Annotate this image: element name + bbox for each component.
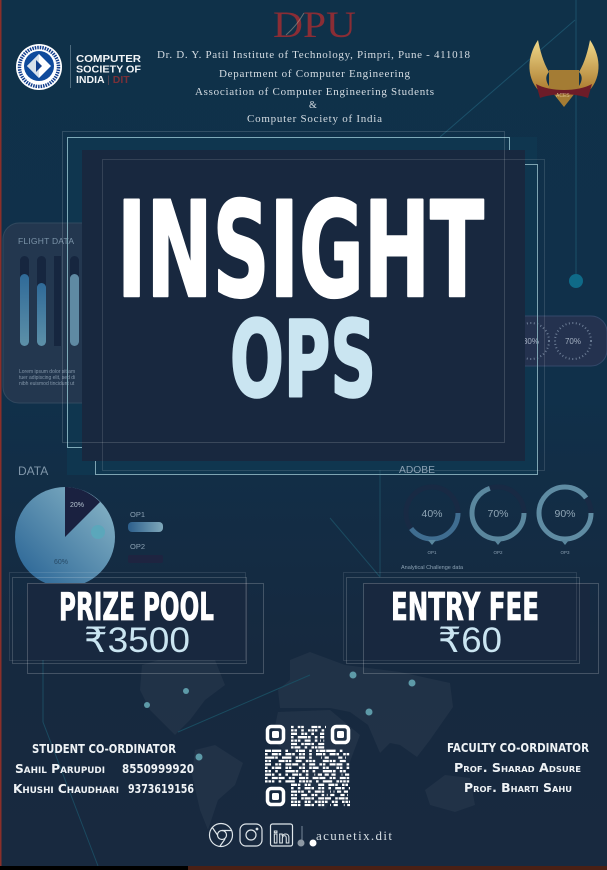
map location dots	[144, 672, 416, 760]
faculty co-ordinators	[447, 741, 589, 795]
ring charts: 70%	[487, 508, 509, 520]
student co-ordinators: Sahil Parupudi	[15, 761, 105, 776]
student co-ordinators: STUDENT CO-ORDINATOR	[32, 741, 176, 756]
ring charts: 40%	[421, 508, 443, 520]
panel: flight data dashboard: tuer adipiscing elit, sed di	[19, 375, 75, 381]
icon: linkedin: in	[273, 828, 290, 847]
icon: instagram	[240, 824, 262, 846]
logo: Computer Society of India: INDIA | DIT	[76, 74, 130, 86]
ring charts: OP1	[427, 550, 437, 555]
panel: flight data dashboard: nibh euismod tincidunt ut	[19, 381, 75, 387]
pie chart: OP1	[130, 510, 145, 519]
icon: teal marker	[569, 274, 583, 288]
ring charts: OP2	[493, 550, 503, 555]
panel: prize pool: ₹3500	[84, 621, 190, 660]
handle: acunetix.dit	[298, 826, 392, 846]
pie chart: OP2	[130, 542, 145, 551]
panel: gauge dials	[500, 316, 607, 366]
header: institute text: Department of Computer Engineering	[219, 68, 410, 80]
handle: acunetix.dit: acunetix.dit	[316, 828, 392, 843]
panel: entry fee: ₹60	[438, 621, 502, 660]
pie chart: 20%	[70, 502, 84, 509]
icon: chrome	[210, 824, 232, 846]
ring charts: ADOBE	[399, 465, 435, 476]
pie chart	[15, 464, 163, 587]
header: institute text: Computer Society of India	[247, 113, 382, 125]
header: institute text	[157, 49, 470, 125]
panel: flight data dashboard: FLIGHT DATA	[18, 236, 74, 246]
panel: gauge dials: 30%	[523, 337, 539, 346]
title: OPS	[230, 299, 376, 421]
panel: flight data dashboard: Lorem ipsum dolor sit am	[19, 369, 75, 375]
title	[117, 174, 484, 421]
panel: entry fee	[344, 572, 598, 674]
map connector line	[178, 675, 310, 732]
icon: ACES winged crest: ACES	[556, 93, 570, 99]
logo: Computer Society of India: SOCIETY OF	[76, 64, 142, 76]
ring charts: 90%	[554, 508, 576, 520]
icon: linkedin	[270, 824, 292, 847]
world map	[140, 652, 475, 830]
ring charts	[399, 465, 591, 571]
icon: ACES winged crest	[529, 40, 599, 107]
panel: flight data dashboard	[3, 223, 113, 403]
panel: title frame	[62, 132, 544, 474]
header: institute text: &	[309, 100, 317, 111]
header: institute text: Dr. D. Y. Patil Institute of Technology, Pimpri, Pune - 411018	[157, 49, 470, 61]
panel: gauge dials: 70%	[565, 337, 581, 346]
ring charts: Analytical Challenge data	[401, 565, 464, 571]
pie chart: 60%	[54, 559, 68, 566]
pie chart: DATA	[18, 464, 48, 478]
ring charts: OP3	[560, 550, 570, 555]
faculty co-ordinators: Prof. Sharad Adsure	[454, 761, 581, 775]
DPU logo: DPU	[273, 5, 356, 46]
faculty co-ordinators: Prof. Bharti Sahu	[464, 781, 572, 795]
logo: Computer Society of India: COMPUTER	[76, 53, 141, 65]
panel: prize pool	[10, 572, 264, 674]
student co-ordinators: 8550999920	[122, 761, 194, 776]
header: institute text: Association of Computer Engineering Students	[195, 86, 434, 98]
student co-ordinators: 9373619156	[128, 781, 194, 796]
student co-ordinators	[13, 741, 194, 796]
logo: Computer Society of India	[16, 44, 142, 90]
panel: prize pool: PRIZE POOL	[59, 585, 214, 629]
QR code	[265, 726, 350, 805]
student co-ordinators: Khushi Chaudhari	[13, 781, 119, 796]
